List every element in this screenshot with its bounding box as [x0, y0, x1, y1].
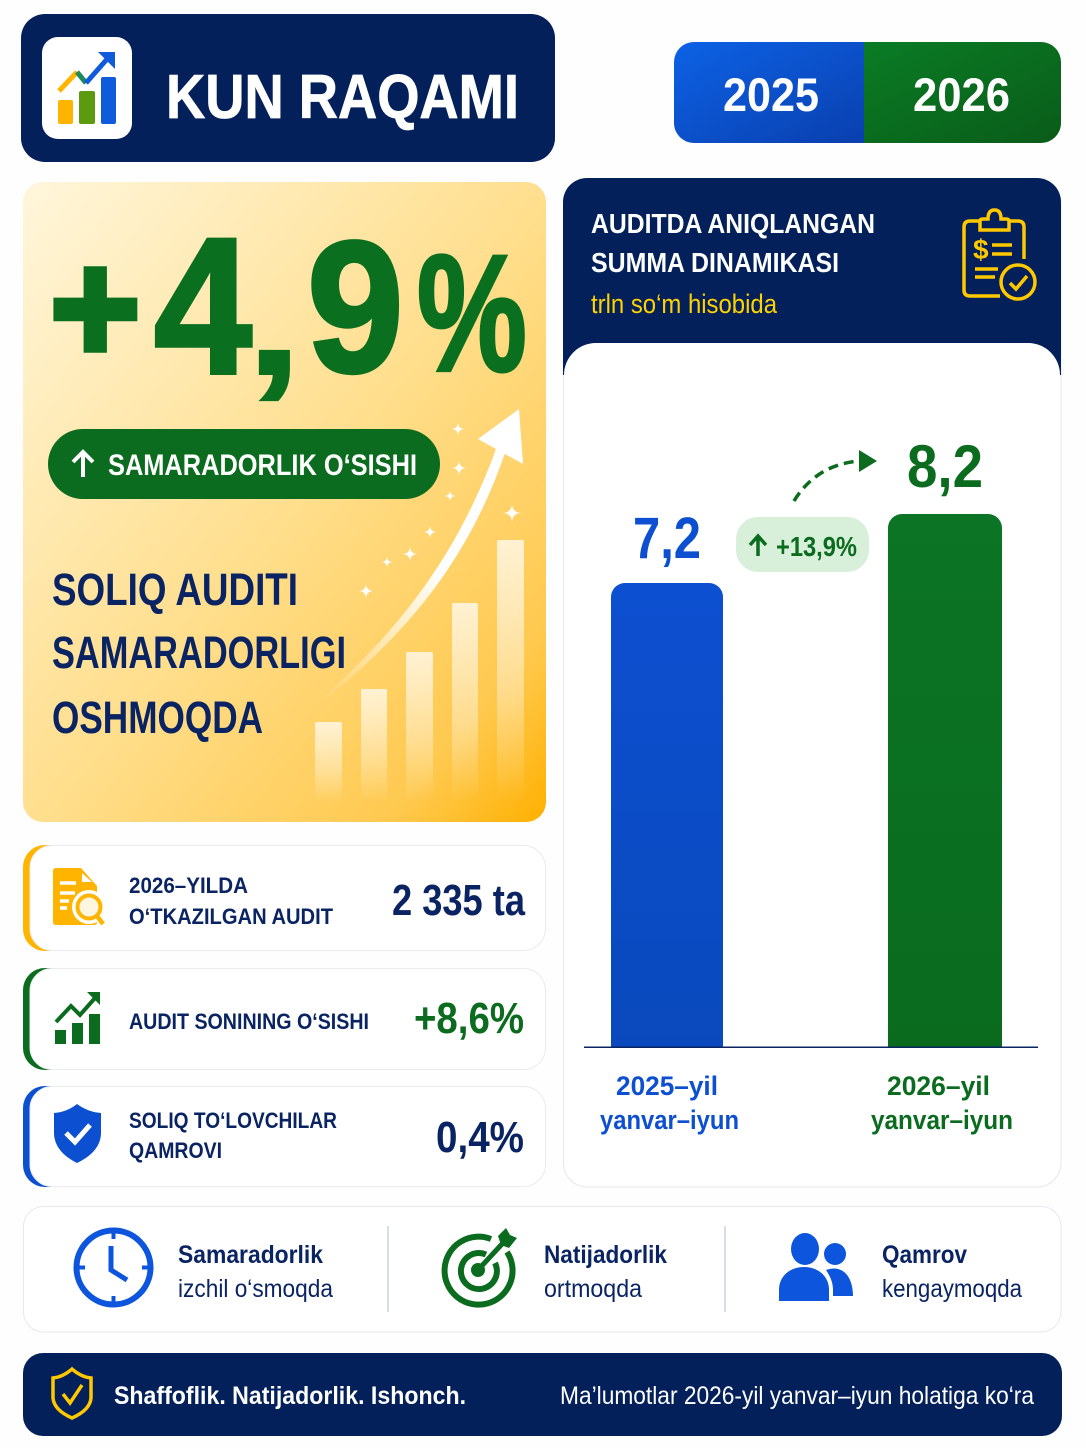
panel heading: SUMMA DINAMIKASI — [591, 247, 839, 278]
headline — [52, 564, 346, 743]
icon: shield check — [54, 1104, 101, 1163]
panel: audit amount dynamics — [563, 178, 1061, 1187]
icon: target — [445, 1228, 517, 1305]
year toggle: 2026 — [913, 68, 1010, 121]
bar: 2025 — [611, 583, 723, 1047]
icon: people — [779, 1233, 853, 1301]
text: results — [544, 1241, 667, 1303]
text: results: Natijadorlik — [544, 1241, 667, 1269]
headline: SOLIQ AUDITI — [52, 564, 298, 615]
icon: gold shield — [53, 1369, 91, 1418]
bar chart — [584, 433, 1038, 1135]
text: coverage: Qamrov — [882, 1241, 967, 1269]
icon: growth bars — [55, 992, 100, 1044]
big number: % — [417, 222, 527, 407]
label: AUDIT SONINING O‘SISHI — [129, 1009, 369, 1034]
value: 0,4% — [436, 1113, 524, 1162]
axis label: 2025 — [600, 1071, 739, 1135]
text: coverage — [882, 1241, 1022, 1303]
title: KUN RAQAMI — [166, 63, 519, 132]
axis label: 2026: yanvar–iyun — [871, 1105, 1013, 1135]
panel heading — [591, 208, 875, 319]
sparkles — [358, 422, 522, 599]
arrow: dashed growth — [794, 450, 877, 501]
panel heading: AUDITDA ANIQLANGAN — [591, 208, 875, 239]
year toggle: 2025 — [723, 68, 819, 121]
axis label: 2026 — [871, 1071, 1013, 1135]
label — [129, 1108, 337, 1163]
big number: 4 — [154, 198, 252, 415]
label: SOLIQ TO‘LOVCHILAR — [129, 1108, 337, 1133]
headline: OSHMOQDA — [52, 692, 263, 743]
big number — [50, 198, 527, 415]
stat card: audits conducted — [23, 845, 546, 951]
big number: 9 — [307, 203, 404, 412]
panel: hero metric — [23, 182, 546, 822]
stat card: audit count growth — [23, 968, 546, 1070]
badge: efficiency growth — [48, 429, 440, 499]
label: QAMROVI — [129, 1138, 222, 1163]
icon: document search — [53, 868, 106, 925]
panel: key qualities — [24, 1206, 1061, 1332]
badge: efficiency growth: SAMARADORLIK O‘SISHI — [108, 449, 417, 482]
stat card: taxpayer coverage — [23, 1086, 546, 1187]
footer banner — [23, 1353, 1062, 1436]
text: efficiency: izchil o‘smoqda — [178, 1275, 333, 1303]
source note: Ma’lumotlar 2026-yil yanvar–iyun holatiga ko‘ra — [560, 1382, 1034, 1410]
icon: clipboard: $ — [973, 234, 989, 265]
icon: growth chart — [42, 37, 132, 139]
label: 2026–YILDA — [129, 873, 248, 898]
value: +8,6% — [414, 994, 524, 1043]
text: coverage: kengaymoqda — [882, 1275, 1022, 1303]
value: 2 335 ta — [392, 876, 525, 925]
axis label: 2025: yanvar–iyun — [600, 1105, 739, 1135]
text: efficiency: Samaradorlik — [178, 1241, 323, 1269]
value: 2026: 8,2 — [907, 433, 983, 500]
bar: 2026 — [888, 514, 1002, 1047]
headline: SAMARADORLIGI — [52, 627, 346, 678]
label: O‘TKAZILGAN AUDIT — [129, 904, 334, 929]
panel heading: trln so‘m hisobida — [591, 289, 778, 319]
icon: clock — [76, 1230, 151, 1305]
year toggle — [674, 42, 1061, 143]
text: efficiency — [178, 1241, 333, 1303]
big number: , — [244, 222, 305, 411]
growth badge — [736, 517, 869, 572]
icon: clipboard — [964, 210, 1035, 299]
growth arrow — [318, 409, 523, 704]
growth badge: +13,9% — [776, 531, 857, 562]
label — [129, 873, 334, 929]
text: results: ortmoqda — [544, 1275, 642, 1303]
big number: + — [50, 220, 141, 396]
header: title banner — [21, 14, 555, 162]
mini bars — [315, 540, 524, 802]
axis label: 2025: 2025–yil — [616, 1071, 718, 1101]
value: 2025: 7,2 — [633, 506, 701, 571]
axis label: 2026: 2026–yil — [887, 1071, 990, 1101]
slogan: Shaffoflik. Natijadorlik. Ishonch. — [114, 1382, 466, 1410]
